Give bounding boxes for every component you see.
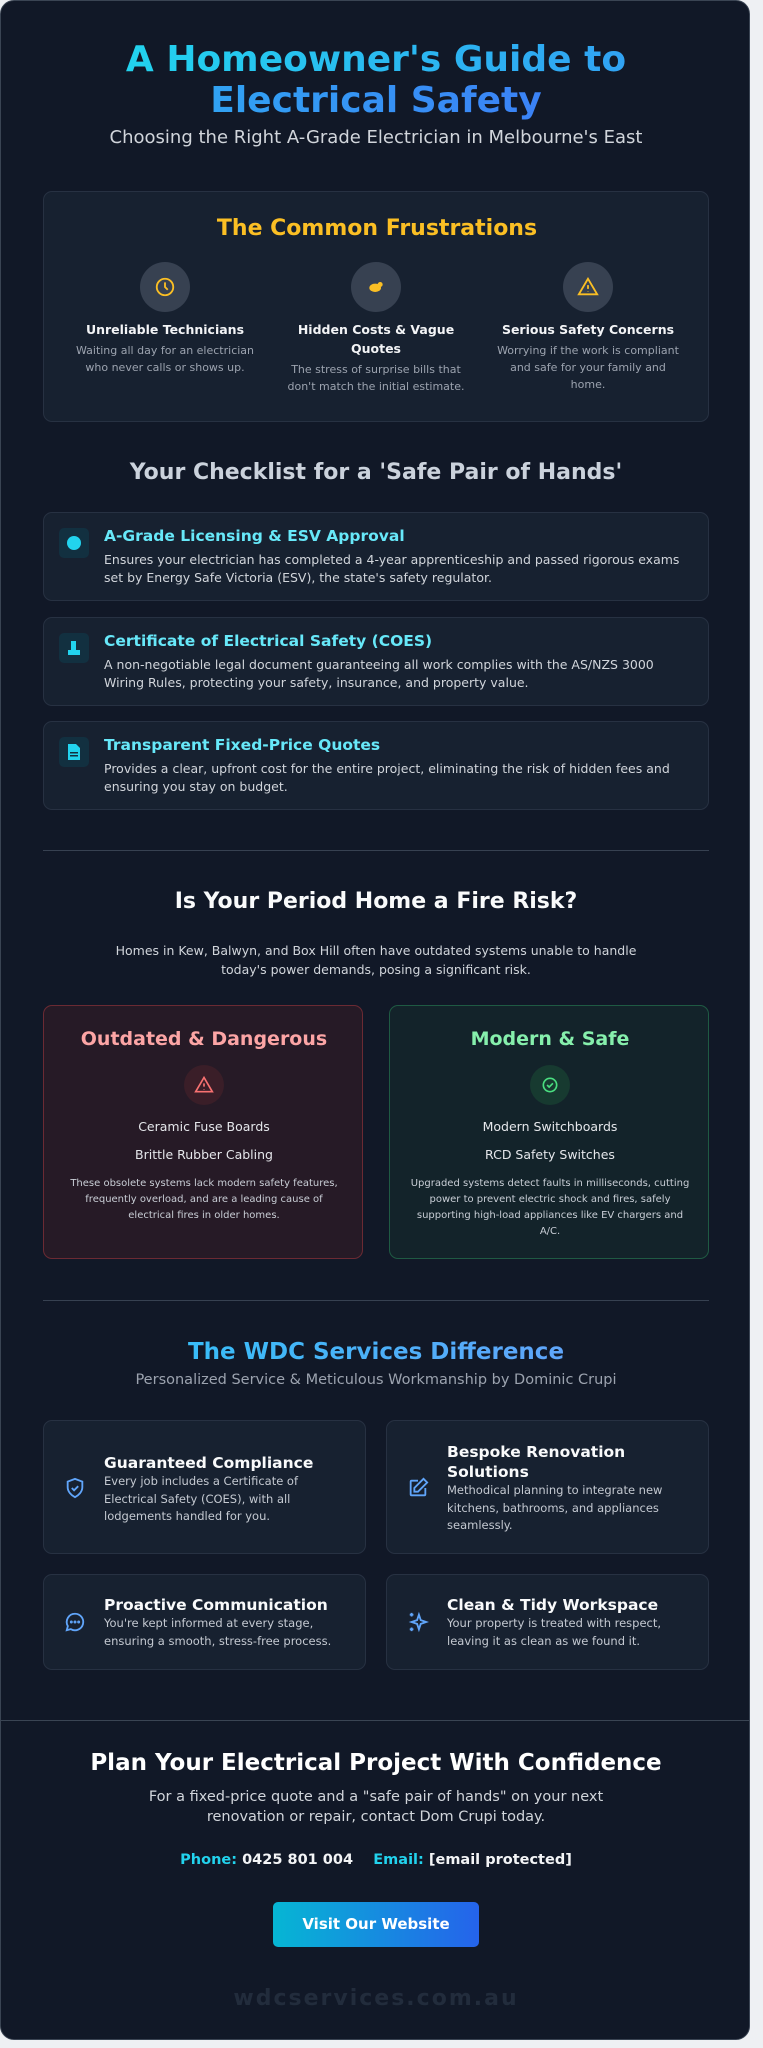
icon: clock xyxy=(140,262,190,312)
panel: modern xyxy=(389,1005,709,1259)
checklist card: COES: A non-negotiable legal document guaranteeing all work complies with the AS/NZS 3000 Wiring Rules, protecting your safety, insurance, and property value. xyxy=(104,657,654,690)
item: hidden costs: Hidden Costs & Vague Quotes xyxy=(298,322,454,356)
contact info: Phone: 0425 801 004 Email: [email protected] xyxy=(180,1852,572,1868)
service: compliance xyxy=(43,1420,366,1554)
title: Electrical Safety xyxy=(210,80,542,121)
subtitle: WDC: Personalized Service & Meticulous Workmanship by Dominic Crupi xyxy=(135,1372,617,1388)
icon: stamp xyxy=(59,633,89,663)
item: unreliable technicians: Waiting all day for an electrician who never calls or shows up. xyxy=(76,344,254,374)
checklist card: quotes: Transparent Fixed-Price Quotes xyxy=(104,736,380,754)
panel: outdated: These obsolete systems lack modern safety features, frequently overload, and are a leading cause of electrical fires in older homes. xyxy=(70,1178,338,1221)
checklist card: licensing: A-Grade Licensing & ESV Approval xyxy=(104,527,405,545)
service: renovation: Methodical planning to integrate new kitchens, bathrooms, and appliances seamlessly. xyxy=(447,1483,662,1532)
service: compliance: Every job includes a Certificate of Electrical Safety (COES), with all lodgements handled for you. xyxy=(104,1474,298,1523)
icon: check green xyxy=(530,1065,570,1105)
icon: document xyxy=(59,737,89,767)
panel: outdated: Outdated & Dangerous xyxy=(81,1028,327,1050)
button: visit website: Visit Our Website xyxy=(302,1915,450,1933)
text: fire risk intro: Homes in Kew, Balwyn, and Box Hill often have outdated systems unable to handle today's power demands, posing a significant risk. xyxy=(116,943,636,977)
icon: money xyxy=(351,262,401,312)
checklist card: licensing xyxy=(43,512,709,601)
panel: outdated: Brittle Rubber Cabling xyxy=(135,1147,273,1162)
service: renovation: Bespoke Renovation Solutions xyxy=(447,1443,625,1481)
icon: warning xyxy=(563,262,613,312)
panel: modern: Upgraded systems detect faults in milliseconds, cutting power to prevent electric shock and fires, safely supporting high-load appliances like EV chargers and A/C. xyxy=(411,1178,689,1237)
service: communication: Proactive Communication xyxy=(104,1596,328,1614)
item: safety concerns: Worrying if the work is compliant and safe for your family and home. xyxy=(497,344,679,391)
icon: warning red xyxy=(184,1065,224,1105)
service: communication: You're kept informed at every stage, ensuring a smooth, stress-free process. xyxy=(104,1616,331,1648)
item: unreliable technicians: Unreliable Technicians xyxy=(86,322,244,337)
panel: modern: Modern & Safe xyxy=(471,1028,629,1050)
heading: frustrations: The Common Frustrations xyxy=(217,216,537,241)
checklist card: quotes: Provides a clear, upfront cost for the entire project, eliminating the risk of hidden fees and ensuring you stay on budget. xyxy=(104,761,670,794)
checklist card: licensing: Ensures your electrician has completed a 4-year apprenticeship and passed rigorous exams set by Energy Safe Victoria (ESV), the state's safety regulator. xyxy=(104,552,679,585)
service: communication xyxy=(43,1574,366,1670)
panel: modern: Modern Switchboards xyxy=(483,1119,617,1134)
service: workspace: Clean & Tidy Workspace xyxy=(447,1596,658,1614)
checklist card: COES xyxy=(43,617,709,706)
heading: checklist: Your Checklist for a 'Safe Pair of Hands' xyxy=(130,460,622,485)
button: visit website xyxy=(273,1902,479,1947)
service: renovation xyxy=(386,1420,709,1554)
text: cta paragraph: For a fixed-price quote and a "safe pair of hands" on your next renovation or repair, contact Dom Crupi today. xyxy=(149,1789,603,1825)
icon: badge xyxy=(59,528,89,558)
checklist card: quotes xyxy=(43,721,709,810)
item: safety concerns xyxy=(497,322,679,391)
subtitle: Choosing the Right A-Grade Electrician in Melbourne's East xyxy=(110,127,642,148)
title: A Homeowner's Guide to xyxy=(126,39,626,80)
heading: plan project: Plan Your Electrical Project With Confidence xyxy=(90,1750,662,1776)
heading: WDC difference: The WDC Services Difference xyxy=(188,1339,564,1365)
panel: outdated: Ceramic Fuse Boards xyxy=(138,1119,270,1134)
checklist card: COES: Certificate of Electrical Safety (COES) xyxy=(104,632,432,650)
item: hidden costs: The stress of surprise bills that don't match the initial estimate. xyxy=(288,363,464,393)
service: workspace: Your property is treated with respect, leaving it as clean as we found it. xyxy=(447,1616,661,1648)
service: compliance: Guaranteed Compliance xyxy=(104,1454,313,1472)
item: hidden costs xyxy=(288,322,464,393)
panel: outdated xyxy=(43,1005,363,1259)
item: safety concerns: Serious Safety Concerns xyxy=(502,322,674,337)
service: workspace xyxy=(386,1574,709,1670)
item: unreliable technicians xyxy=(76,322,254,374)
heading: fire risk: Is Your Period Home a Fire Risk? xyxy=(175,889,577,914)
panel: modern: RCD Safety Switches xyxy=(485,1147,615,1162)
watermark: wdcservices.com.au xyxy=(233,1986,519,2011)
panel: common frustrations xyxy=(43,191,709,422)
title xyxy=(126,39,626,121)
